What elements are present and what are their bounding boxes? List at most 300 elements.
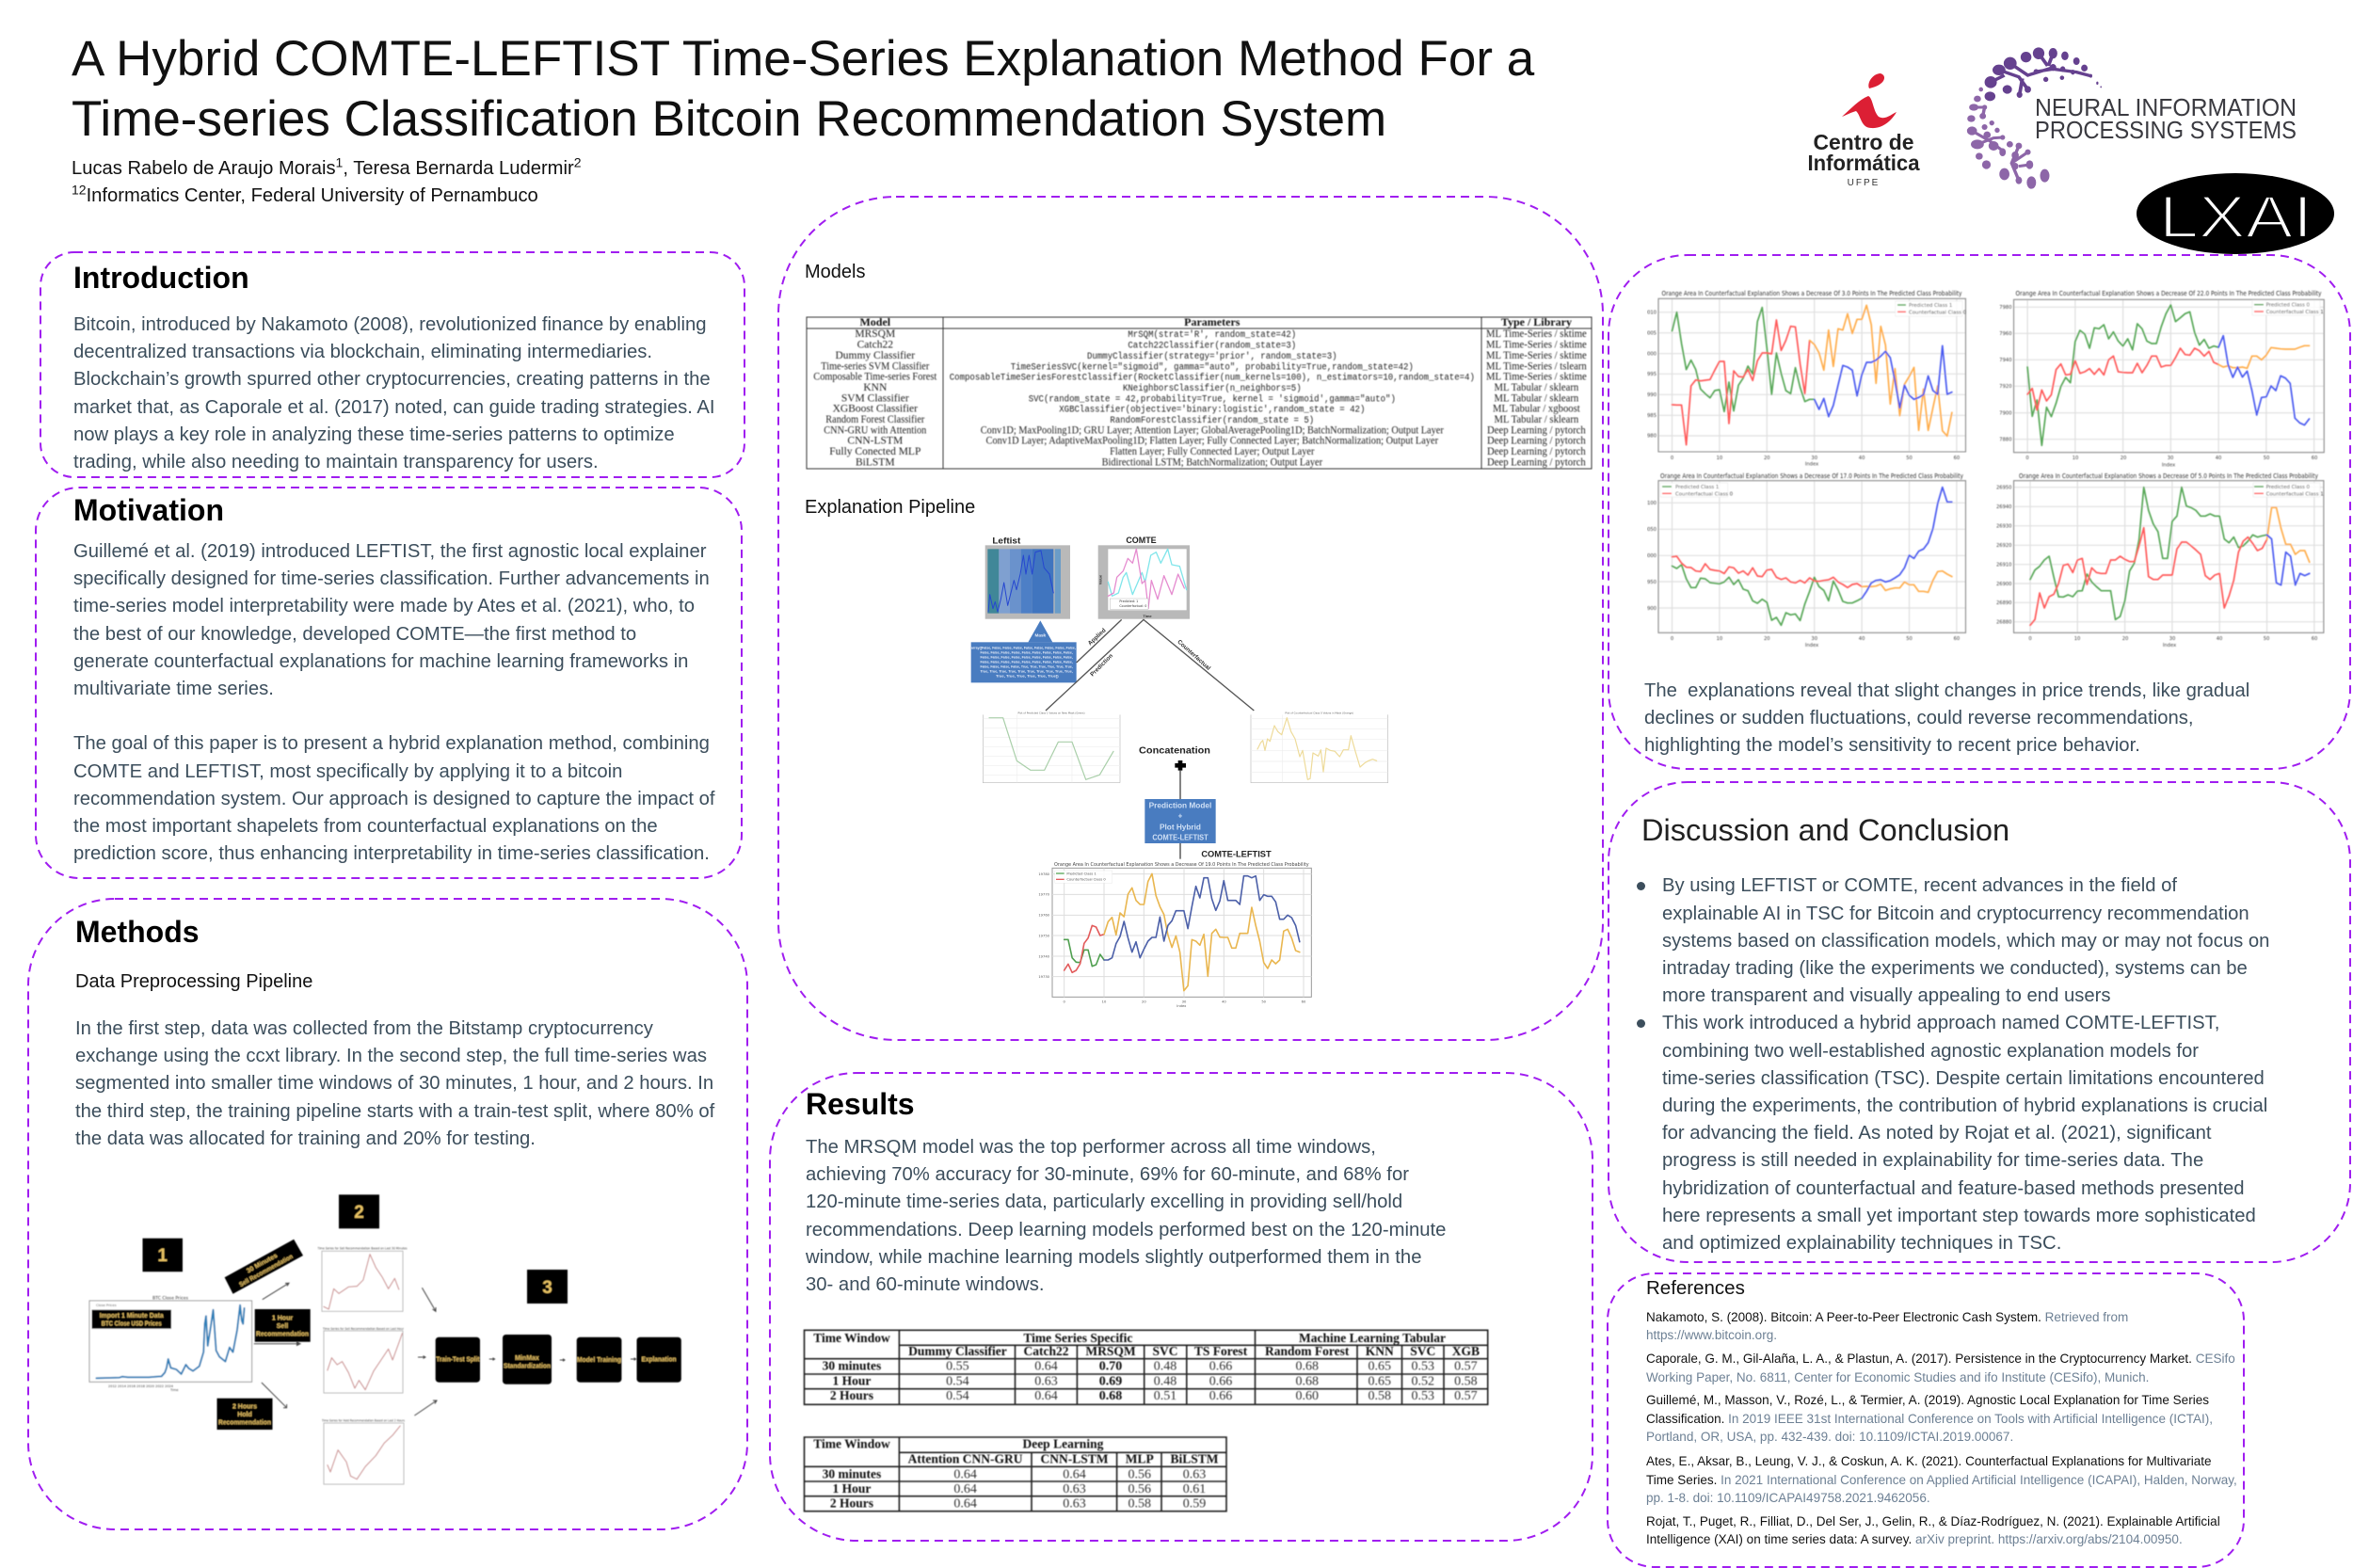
logo: LXAI [2137,173,2334,254]
text: motivation body: recommendation system. Our approach is designed to capture the impact of [73,789,715,809]
authors: Lucas Rabelo de Araujo Morais1, Teresa Bernarda Ludermir2 [72,154,582,179]
table: model parameters: Parameters [1184,315,1241,328]
label: 2 hours hold recommendation: Recommendation [218,1419,271,1427]
arrows: split to windows [254,1283,636,1416]
chart: decrease of 22.0 points: 7980 [1999,305,2012,311]
panel: references [1607,1272,2245,1568]
text: introduction body: now plays a key role in analyzing these time-series patterns to optimize [73,424,675,445]
table: ml accuracy: KNN [1366,1344,1394,1358]
small chart: counterfactual [1251,711,1388,783]
mask array box: False, False, False, False, False, False, False, False, False, [980,661,1073,664]
label: 30 minutes sell recommendation: Sell Recommendation [238,1254,295,1288]
table: model parameters: Conv1D; MaxPooling1D; GRU Layer; Attention Layer; GlobalAveragePooling1D; BatchNormalization; Output Layer [981,424,1444,436]
table: model parameters: ML Tabular / sklearn [1495,392,1579,404]
table: ml accuracy: 0.66 [1209,1389,1232,1403]
chart: decrease of 3.0 points: 60 [1954,456,1960,461]
table: ml accuracy: 0.55 [946,1360,969,1374]
label: 1 hour sell recommendation [255,1309,311,1342]
table: model parameters: ML Time-Series / sktime [1486,328,1587,340]
bullet: second conclusion: time-series classification (TSC). Despite certain limitations encountered [1662,1068,2265,1089]
chart: decrease of 22.0 points: 7920 [1999,384,2012,390]
table: deep learning accuracy: 0.64 [953,1482,977,1496]
chart: decrease of 17.0 points: 0 [1671,636,1673,642]
label: import 1 minute data: BTC Close USD Prices [102,1321,162,1327]
step badge 3 [527,1270,568,1304]
step: explanation [636,1337,681,1383]
table: model parameters: Dummy Classifier [835,350,915,361]
heading: Explanation Pipeline: Explanation Pipeline [805,497,975,518]
table: ml accuracy: 0.64 [1034,1389,1058,1403]
label: 1 hour sell recommendation: Sell [277,1323,288,1330]
chart: comte-leftist hybrid: 19730 [1038,975,1050,979]
step: explanation: Explanation [642,1357,676,1363]
chart: comte-leftist hybrid: 50 [1261,1000,1267,1003]
heading: Introduction: Introduction [73,261,249,295]
table: ml accuracy: 1 Hour [833,1373,871,1387]
table: ml accuracy: TS Forest [1194,1344,1248,1358]
table: ml accuracy: 0.66 [1209,1360,1232,1374]
panel: discussion and conclusion [1608,781,2351,1263]
heading: Methods: Methods [75,915,200,949]
panel: results [769,1072,1593,1542]
chart: comte-leftist hybrid: 40 [1222,1000,1226,1003]
step: minmax standardization: MinMax [515,1355,539,1362]
table: deep learning accuracy: Attention CNN-GRU [908,1451,1023,1466]
label: 1 hour sell recommendation: Recommendation [256,1331,309,1338]
table: model parameters: XGBClassifier(objective='binary:logistic',random_state = 42) [1059,404,1365,415]
mask triangle [1028,620,1052,642]
chart: decrease of 17.0 points: Orange Area In Counterfactual Explanation Shows a Decrease Of 17.0 Points In The Predicted Class Probability [1660,472,1963,480]
chart: decrease of 22.0 points [1999,290,2324,469]
prediction model box: + [1178,811,1183,820]
chart: comte-leftist hybrid: 19750 [1038,934,1050,937]
chart: decrease of 17.0 points: 50 [1906,636,1913,642]
comte panel: Counterfactual: 0 [1119,604,1146,608]
table: ml accuracy: 0.65 [1369,1374,1391,1388]
step badge 2 [339,1194,379,1228]
table: deep learning accuracy: 0.56 [1128,1482,1151,1496]
arrows with labels: Prediction [1089,652,1114,678]
reference list: Rojat, T., Puget, R., Filliat, D., Del Ser, J., Gelin, R., & Díaz-Rodríguez, N. (2021). Explainable Artificial [1646,1514,2220,1528]
mask array box [971,642,1077,682]
table: deep learning accuracy: Time Window [813,1436,890,1451]
bullet: second conclusion: progress is still needed in explainability for time-series data. The [1662,1150,2203,1171]
table: model parameters: XGBoost Classifier [833,404,918,415]
prediction model box: Prediction Model [1149,802,1211,810]
table: ml accuracy: Catch22 [1024,1344,1069,1358]
text: explanation summary: declines or sudden fluctuations, could reverse recommendations, [1644,708,2194,728]
table: ml accuracy: SVC [1410,1344,1435,1358]
table: model parameters: ComposableTimeSeriesForestClassifier(RocketClassifier(num_kernels=100), n_estimators=10,random_state=4) [950,372,1475,383]
reference list: pp. 1-8. doi: 10.1109/ICAPAI49758.2021.9462056. [1646,1491,1930,1505]
chart: decrease of 5.0 points: 26950 [1996,485,2012,490]
table: ml accuracy: 0.68 [1295,1374,1319,1388]
chart: decrease of 5.0 points: 40 [2217,636,2222,642]
table: model parameters: DummyClassifier(strategy='prior', random_state=3) [1087,351,1337,361]
chart: decrease of 22.0 points: 7960 [1999,331,2012,337]
table: deep learning accuracy: 2 Hours [830,1496,873,1510]
table: model parameters: Type / Library [1501,315,1572,328]
table: model parameters: CNN-GRU with Attention [824,424,927,436]
affiliation: 12Informatics Center, Federal University of Pernambuco [72,182,538,205]
table: ml accuracy: 2 Hours [830,1388,873,1402]
heading: Motivation: Motivation [73,493,224,527]
chart: decrease of 5.0 points: 26920 [1996,543,2012,549]
bullet: first conclusion: systems based on classification models, which may or may not focus on [1662,931,2269,952]
bullet: second conclusion: for advancing the field. As noted by Rojat et al. (2021), significant [1662,1123,2212,1144]
table: ml accuracy: 0.52 [1412,1374,1434,1388]
heading: Discussion and Conclusion: Discussion and Conclusion [1641,812,2009,847]
text: introduction body: Blockchain’s growth spurred other cryptocurrencies, creating patterns in the [73,369,711,390]
chart: decrease of 22.0 points: Predicted Class 0 [2266,303,2311,309]
table: model parameters: Catch22 [857,339,893,350]
leftist panel [985,536,1070,619]
label: 1 hour sell recommendation: 1 Hour [272,1316,293,1321]
reference list [1646,1310,2237,1546]
table: ml accuracy: Time Window [813,1331,890,1345]
title: Time-series Classification Bitcoin Recommendation System [72,91,1386,147]
table: deep learning accuracy: MLP [1126,1451,1154,1466]
mask array box: True, True, True, True, True, True, True, True, True, True, [980,670,1073,674]
chart: decrease of 5.0 points: 26940 [1996,504,2012,510]
chart: decrease of 5.0 points: Counterfactual Class 1 [2266,491,2324,497]
reference list: Time Series. In 2021 International Conference on Applied Artificial Intelligence (ICAPAI), Halden, Norway, [1646,1473,2237,1487]
table: model parameters: Deep Learning / pytorch [1487,446,1586,457]
panel: motivation [35,487,743,879]
chart: decrease of 22.0 points: 40 [2216,456,2221,461]
table: ml accuracy: 0.66 [1209,1374,1232,1388]
logos [1807,47,2334,254]
table: model parameters: ML Time-Series / sktime [1486,339,1587,351]
chart: decrease of 3.0 points: Predicted Class 1 [1909,303,1952,309]
table: ml accuracy: Time Series Specific [1023,1331,1132,1345]
chart: comte-leftist hybrid: 19740 [1038,954,1050,958]
table: ml accuracy: XGB [1452,1344,1480,1358]
bullet: first conclusion: explainable AI in TSC for Bitcoin and cryptocurrency recommendation [1662,904,2249,924]
table: model parameters [806,315,1593,471]
table: deep learning accuracy: 0.64 [1063,1467,1086,1481]
chart: BTC close prices [89,1295,252,1392]
chart: decrease of 22.0 points: 7880 [1999,437,2012,442]
table: ml accuracy: 0.60 [1295,1389,1319,1403]
reference list: Nakamoto, S. (2008). Bitcoin: A Peer-to-Peer Electronic Cash System. Retrieved from [1646,1310,2128,1324]
label: 30 minutes sell recommendation [225,1240,303,1294]
table: ml accuracy: 0.57 [1454,1389,1478,1403]
mask array box: False, False, False, False, False, False, False, False, False, [980,651,1073,655]
chart: decrease of 22.0 points: 60 [2312,456,2317,461]
table: model parameters: MRSQM [855,328,895,340]
chart: decrease of 3.0 points: 10 [1717,456,1722,461]
table: deep learning accuracy: CNN-LSTM [1040,1451,1109,1466]
mask triangle: Mask [1035,633,1047,638]
concatenation [1139,746,1210,799]
chart: decrease of 5.0 points: 26880 [1996,619,2012,625]
text: results body: 30- and 60-minute windows. [806,1274,1044,1295]
table: ml accuracy: MRSQM [1085,1344,1136,1358]
logo: Centro de Informática [1807,73,1920,188]
chart: decrease of 3.0 points: 40 [1859,456,1865,461]
chart: decrease of 5.0 points: 26930 [1996,523,2012,529]
chart: decrease of 22.0 points: 50 [2264,456,2269,461]
chart: comte-leftist hybrid: Counterfactual Class 0 [1066,878,1106,882]
text: explanation summary: The explanations reveal that slight changes in price trends, like gradual [1644,680,2249,701]
chart: comte-leftist hybrid: 19770 [1038,893,1050,897]
reference list: Intelligence (XAI) on time series data: A survey. arXiv preprint. https://arxiv.org/abs/2104.00950. [1646,1532,2183,1546]
table: model parameters: KNN [863,382,888,393]
chart: comte-leftist hybrid: 60 [1302,1000,1306,1003]
step badge 3: 3 [542,1278,552,1298]
mask array box: True, True, True, True, True, True]) [996,675,1060,679]
table: model parameters: Fully Conected MLP [829,446,920,457]
heading: Results: Results [806,1087,915,1121]
table: ml accuracy: 0.53 [1412,1360,1434,1374]
chart: decrease of 17.0 points: 40 [1859,636,1865,642]
subheading: data preprocessing: Data Preprocessing Pipeline [75,971,312,992]
table: model parameters: Conv1D Layer; AdaptiveMaxPooling1D; Flatten Layer; Fully Connected Layer; BatchNormalization; Output Layer [986,435,1438,447]
text: methods body: exchange using the ccxt library. In the second step, the full time-series was [75,1046,707,1066]
text: results body [806,1137,1446,1295]
text: methods body: the third step, the training pipeline starts with a train-test split, where 80% of [75,1101,714,1122]
chart: decrease of 17.0 points: 20 [1764,636,1770,642]
chart: decrease of 17.0 points: Index [1805,643,1818,648]
table: model parameters: Deep Learning / pytorch [1487,435,1586,447]
text: motivation body [73,541,715,864]
table: ml accuracy: 0.64 [1034,1360,1058,1374]
table: deep learning accuracy: 1 Hour [833,1481,871,1496]
logo: Centro de Informática: UFPE [1848,178,1880,188]
text: explanation summary [1644,680,2249,756]
text: results body: recommendations. Deep learning models performed best on the 120-minute [806,1220,1446,1240]
step: minmax standardization: Standardization [504,1363,551,1370]
table: model parameters: RandomForestClassifier(random_state = 5) [1110,415,1314,425]
logo: Centro de Informática: Centro de [1813,130,1914,154]
label: 2 hours hold recommendation: 2 Hours [232,1404,257,1410]
chart: BTC close prices: Time [169,1388,179,1392]
chart: decrease of 22.0 points: 20 [2121,456,2126,461]
table: model parameters: ML Tabular / sklearn [1495,414,1579,425]
chart: decrease of 5.0 points: 60 [2312,636,2317,642]
text: results body: window, while machine learning models slightly outperformed them in the [806,1247,1421,1268]
step: train-test split: Train-Test Split [436,1357,480,1363]
text: motivation body: the most important shapelets from counterfactual explanations on the [73,816,658,837]
reference list: Caporale, G. M., Gil-Alaña, L. A., & Plastun, A. (2017). Persistence in the Cryptocurrency Market. CESifo [1646,1352,2235,1366]
reference list: Working Paper, No. 6811, Center for Economic Studies and ifo Institute (CESifo), Munich. [1646,1370,2149,1384]
concatenation: Concatenation [1139,746,1210,757]
table: model parameters: Deep Learning / pytorch [1487,424,1586,436]
chart: decrease of 17.0 points [1641,472,1965,648]
chart: comte-leftist hybrid: 0 [1064,1000,1066,1003]
chart: comte-leftist hybrid: Orange Area In Counterfactual Explanation Shows a Decrease Of 19.0 Points In The Predicted Class Probability [1054,862,1309,868]
table: model parameters: Composable Time-series Forest [813,372,937,383]
heading: Models: Models [805,262,865,282]
logo: Neural Information Processing Systems: NEURAL INFORMATION [2035,93,2297,121]
chart: 30 minute window [317,1246,408,1311]
chart: decrease of 22.0 points: Counterfactual Class 1 [2266,310,2324,315]
panel: methods [27,898,748,1530]
chart: decrease of 5.0 points [1996,472,2324,648]
table: model parameters: Deep Learning / pytorch [1487,456,1586,468]
table: model parameters: BiLSTM [856,456,895,468]
bullet: second conclusion: here represents a small yet important step towards more sophisticated [1662,1206,2256,1226]
step: model training [577,1337,621,1383]
text: motivation body: COMTE and LEFTIST, most specifically by applying it to a bitcoin [73,761,622,782]
panel: counterfactual charts [1608,254,2351,770]
bullet: first conclusion: By using LEFTIST or COMTE, recent advances in the field of [1662,875,2177,896]
chart: 30 minute window: Time Series for Sell Recommendation Based on Last 30 Minutes [317,1246,408,1250]
logo: LXAI: LXAI [2159,184,2313,250]
table: ml accuracy: SVC [1152,1344,1178,1358]
table: ml accuracy: Dummy Classifier [908,1344,1007,1358]
chart: decrease of 5.0 points: 10 [2074,636,2080,642]
table: ml accuracy: 30 minutes [823,1359,881,1373]
chart: comte-leftist hybrid: 20 [1142,1000,1146,1003]
table: model parameters: KNeighborsClassifier(n_neighbors=5) [1123,383,1302,393]
diagram: explanation pipeline [971,536,1388,1008]
table: model parameters: CNN-LSTM [847,436,903,447]
charts: four counterfactual explanations [1647,290,2325,648]
label: import 1 minute data: Import 1 Minute Data [100,1313,164,1320]
comte panel: Value [1098,574,1103,584]
text: results body: achieving 70% accuracy for 30-minute, 69% for 60-minute, and 68% for [806,1164,1409,1185]
bullet: first conclusion: more transparent and visually appealing to end users [1662,985,2111,1006]
bullet: second conclusion: during the experiments, the contribution of hybrid explanations is crucial [1662,1096,2267,1116]
chart: 1 hour window: Time Series for Sell Recommendation Based on Last Hour [322,1327,405,1331]
text: motivation body: the best of our knowledge, developed COMTE—the first method to [73,623,636,644]
chart: decrease of 5.0 points: 26910 [1996,562,2012,568]
leftist panel: Leftist [992,536,1020,545]
chart: decrease of 22.0 points: 10 [2073,456,2078,461]
table: deep learning accuracy: 0.58 [1128,1496,1151,1511]
chart: decrease of 22.0 points: 7900 [1999,410,2012,416]
table: model parameters: Catch22Classifier(random_state=3) [1128,340,1296,351]
table: model parameters: SVC(random_state = 42,probability=True, kernel = 'sigmoid',gamma="auto") [1029,393,1396,404]
step: train-test split [436,1337,480,1383]
table: model parameters: ML Time-Series / tslearn [1486,360,1587,372]
table: deep learning accuracy: 0.56 [1128,1467,1151,1481]
mask array box: False, False, False, False, False, False, False, False, False, [980,656,1073,660]
step: minmax standardization [503,1335,552,1384]
chart: decrease of 3.0 points: 20 [1764,456,1770,461]
text: methods body: segmented into smaller time windows of 30 minutes, 1 hour, and 2 hours. In [75,1073,713,1094]
step badge 2: 2 [354,1203,364,1223]
table: model parameters: Random Forest Classifier [825,414,924,425]
table: model parameters: Flatten Layer; Fully Connected Layer; Output Layer [1110,446,1315,457]
step: model training: Model Training [577,1357,621,1364]
chart: comte-leftist hybrid: 30 [1182,1000,1187,1003]
table: ml accuracy: 0.68 [1099,1389,1122,1403]
comte panel: Time [1143,614,1152,618]
table: deep learning accuracy: 0.59 [1183,1496,1206,1511]
table: deep learning accuracy: 0.63 [1063,1496,1086,1511]
table: ml accuracy: 0.58 [1454,1374,1478,1388]
comte panel: COMTE [1126,536,1157,545]
title: A Hybrid COMTE-LEFTIST Time-Series Explanation Method For a [72,31,1534,87]
text: explanation summary: highlighting the model’s sensitivity to recent price behavior. [1644,735,2140,756]
table: model parameters: Model [859,315,891,328]
text: methods body: In the first step, data was collected from the Bitstamp cryptocurrency [75,1018,653,1039]
table: model parameters: ML Tabular / sklearn [1495,382,1579,393]
title [72,31,1534,147]
panel: models and explanation pipeline [777,196,1604,1041]
table: deep learning accuracy: 30 minutes [823,1466,881,1480]
table: deep learning accuracy: 0.63 [1183,1467,1206,1481]
table: deep learning accuracy: 0.61 [1183,1482,1206,1496]
chart: decrease of 5.0 points: 50 [2264,636,2269,642]
reference list: Ates, E., Aksar, B., Leung, V. J., & Coskun, A. K. (2021). Counterfactual Explanations for Multivariate [1646,1454,2212,1468]
table: deep learning accuracy: 0.64 [953,1467,977,1481]
chart: decrease of 17.0 points: Predicted Class 1 [1675,485,1719,490]
text: results body: 120-minute time-series data, particularly excelling in providing sell/hold [806,1192,1402,1212]
mask array box: array([False, False, False, False, False, False, False, False, False, [971,647,1076,650]
text: introduction body: trading, while also needing to maintain transparency for users. [73,452,599,472]
bullet: second conclusion: combining two well-established agnostic explanation models for [1662,1041,2199,1062]
chart: decrease of 3.0 points: 50 [1906,456,1913,461]
table: ml accuracy: 0.54 [946,1389,969,1403]
table: model parameters: SVM Classifier [841,392,909,404]
table: ml accuracy: 0.54 [946,1374,969,1388]
chart: decrease of 3.0 points: Index [1805,461,1818,467]
reference list: Guillemé, M., Masson, V., Rozé, L., & Termier, A. (2019). Agnostic Local Explanation for Time Series [1646,1393,2209,1407]
text: introduction body: Bitcoin, introduced by Nakamoto (2008), revolutionized finance by enabling [73,314,707,335]
small chart: predicted class [983,711,1120,783]
chart: decrease of 17.0 points: 30 [1811,636,1817,642]
small chart: predicted class: Plot of Predicted Class 1 Values on New Mask (Green) [1017,711,1085,714]
chart: decrease of 5.0 points: Index [2163,643,2176,648]
mask array box: False, False, False, False, True, True, True, True, True, True, [980,665,1073,669]
chart: decrease of 17.0 points: Counterfactual Class 0 [1675,491,1734,497]
step badge 1: 1 [157,1246,168,1266]
chart: decrease of 3.0 points: Counterfactual Class 0 [1909,310,1967,315]
table: ml accuracy: 0.48 [1154,1374,1176,1388]
table: ml accuracy: 0.51 [1154,1389,1176,1403]
chart: comte-leftist hybrid: Predicted Class 1 [1066,872,1096,875]
table: deep learning accuracy: BiLSTM [1170,1451,1219,1466]
chart: decrease of 5.0 points: 20 [2122,636,2128,642]
text: methods body: the data was allocated for training and 20% for testing. [75,1128,536,1149]
text: motivation body: time-series model interpretability were made by Ates et al. (2021), who, to [73,596,695,616]
chart: decrease of 5.0 points: 26890 [1996,600,2012,606]
label: 2 hours hold recommendation [216,1399,273,1430]
text: motivation body: specifically designed for time-series classification. Further advancements in [73,568,710,589]
heading: References: References [1646,1277,1745,1299]
chart: BTC close prices: Close Prices [96,1304,117,1307]
table: model parameters: Time-series SVM Classifier [821,360,929,372]
chart: 2 hour window: Time Series for Hold Recommendation Based on Last 2 Hours [321,1419,405,1423]
chart: BTC close prices: BTC Close Prices [152,1295,189,1301]
prediction model box [1144,799,1216,859]
text: motivation body: generate counterfactual explanations for machine learning frameworks in [73,651,688,672]
table: ml accuracy: 0.63 [1034,1374,1058,1388]
label: import 1 minute data [92,1310,171,1329]
table: model parameters: ML Time-Series / sktime [1486,371,1587,383]
table: model parameters: ML Time-Series / sktime [1486,350,1587,361]
text: results body: The MRSQM model was the top performer across all time windows, [806,1137,1376,1158]
chart: decrease of 22.0 points: 0 [2025,456,2029,461]
arrows with labels [1046,619,1254,711]
label: 30 minutes sell recommendation: 30 Minutes [246,1253,279,1274]
bullet: second conclusion [1637,1013,2267,1254]
step badge 1 [143,1239,183,1272]
table: deep learning accuracy: 0.63 [1063,1482,1086,1496]
text: motivation body: Guillemé et al. (2019) introduced LEFTIST, the first agnostic local explainer [73,541,706,562]
bullet: second conclusion: hybridization of counterfactual and feature-based methods presented [1662,1178,2244,1199]
chart: comte-leftist hybrid: 19760 [1038,914,1050,918]
bullet: first conclusion [1637,875,2269,1006]
text: introduction body: market that, as Caporale et al. (2017) noted, can guide trading strategies. AI [73,397,715,418]
chart: decrease of 3.0 points: 0 [1671,456,1673,461]
logo: Centro de Informática: Informática [1807,151,1920,175]
chart: comte-leftist hybrid: COMTE-LEFTIST [1201,850,1272,859]
